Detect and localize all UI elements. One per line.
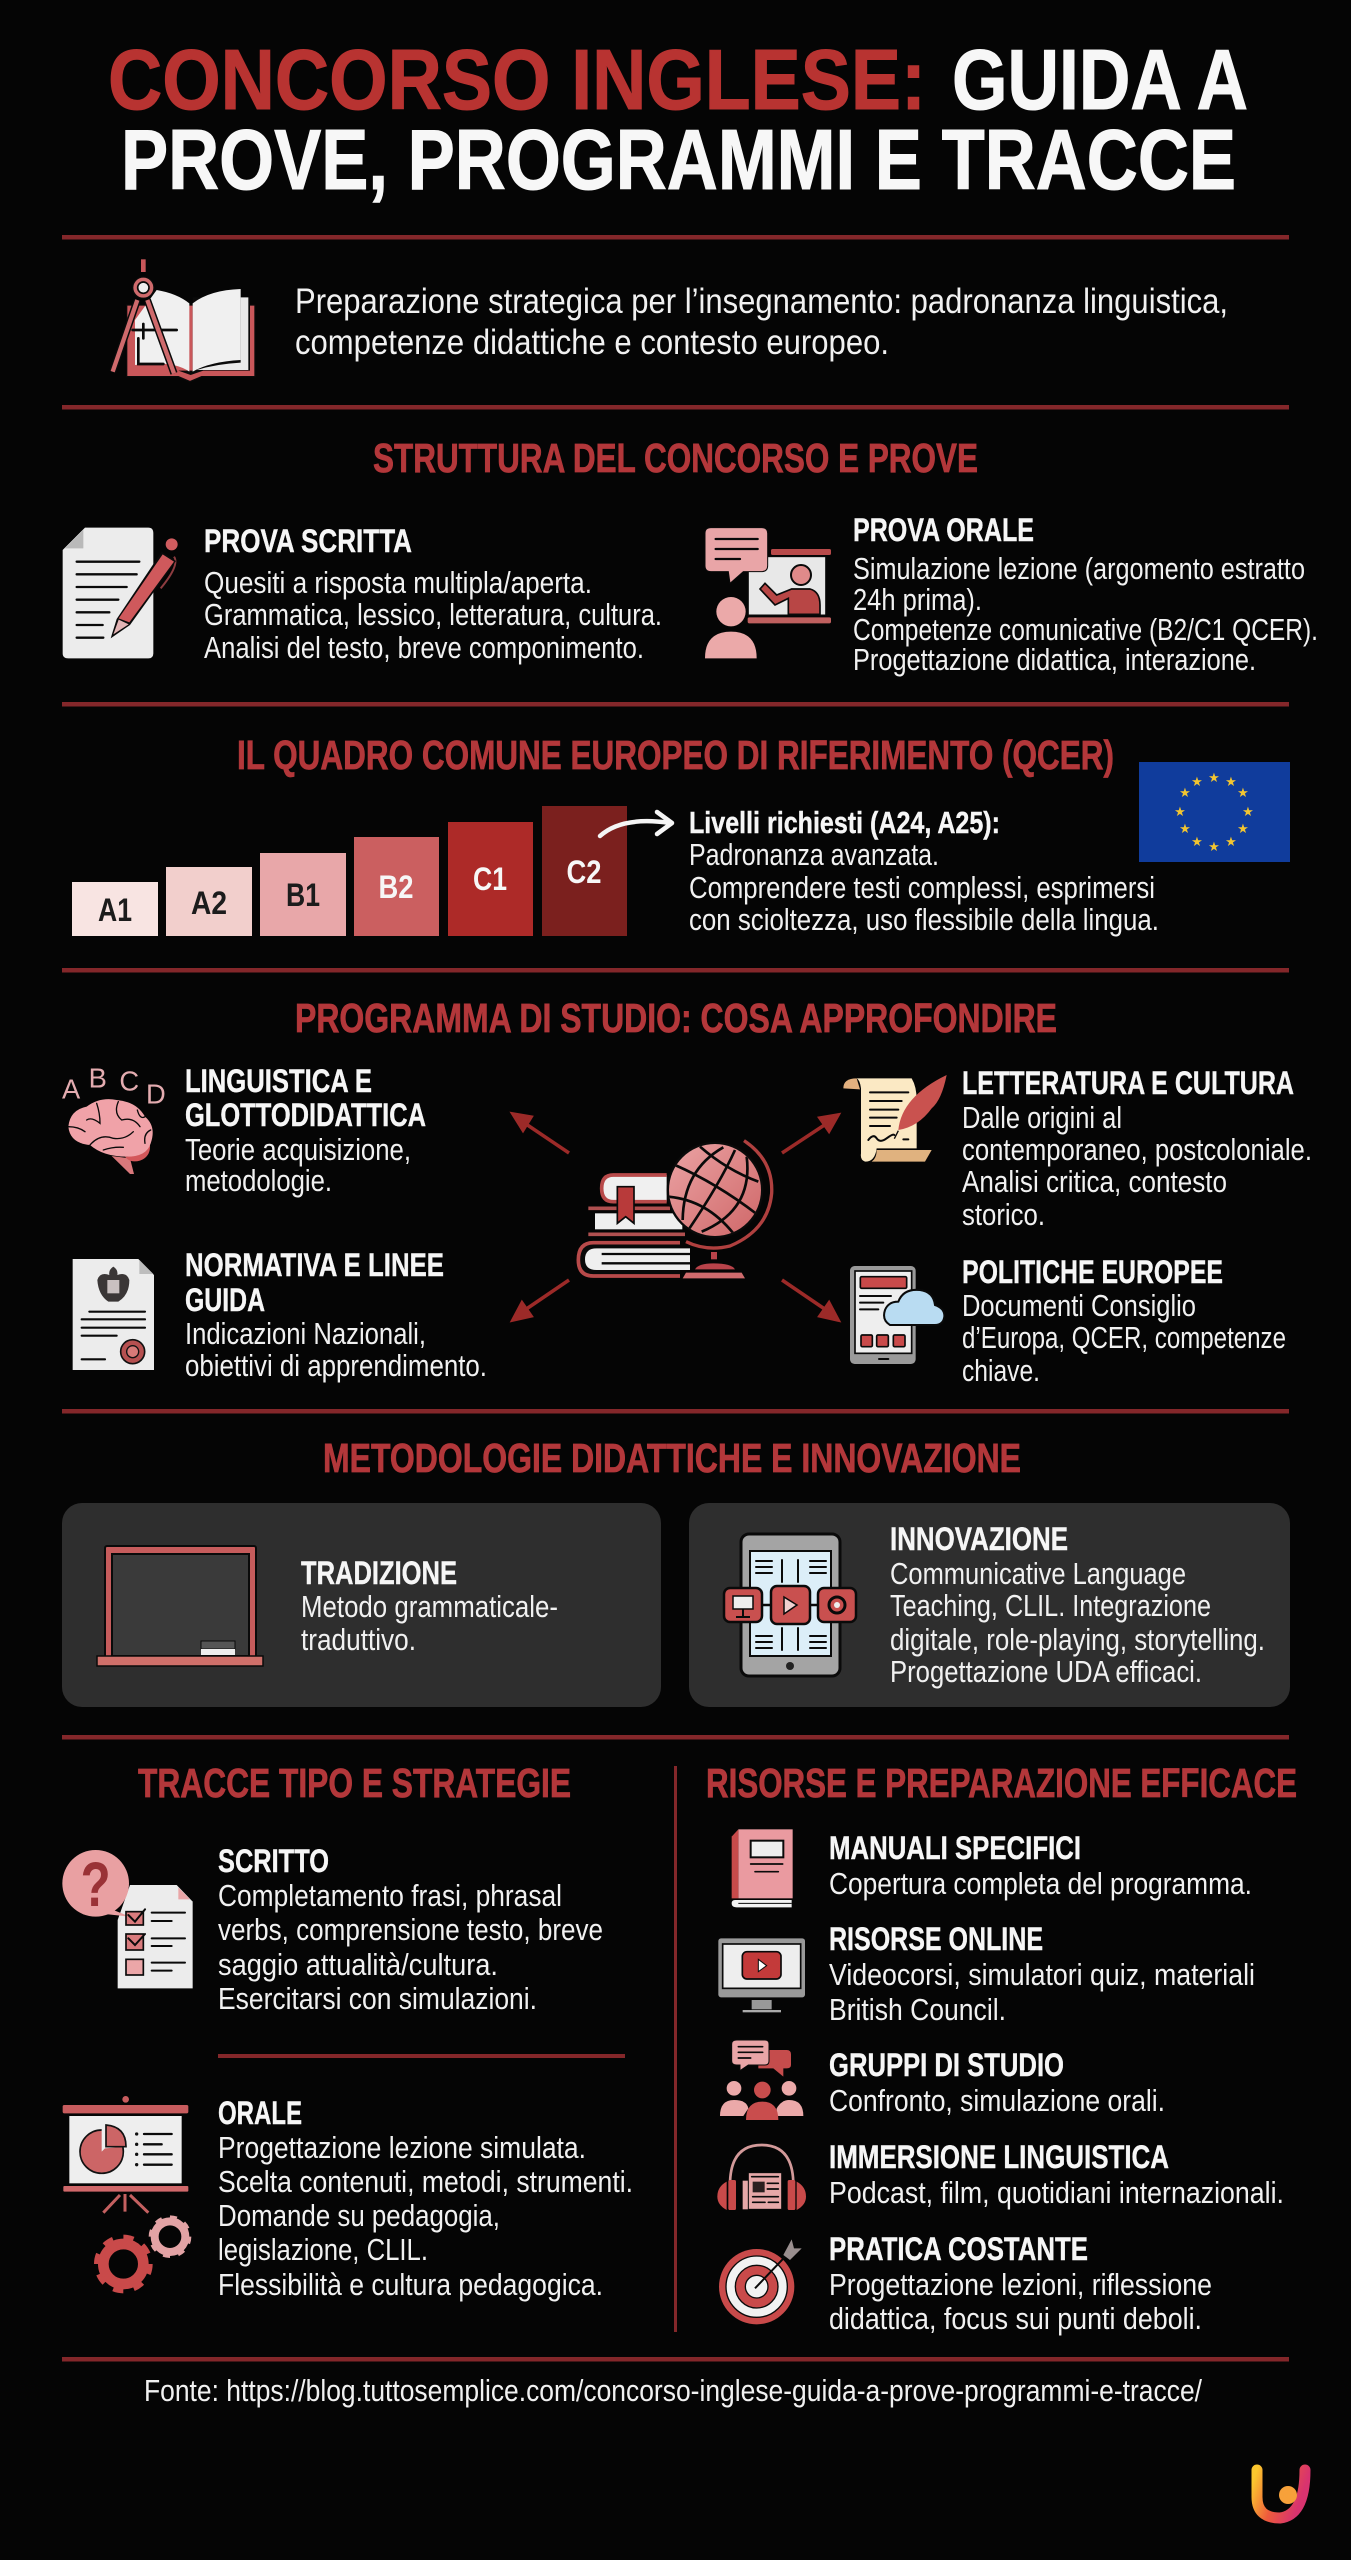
text: politiche: chiave. bbox=[962, 1354, 1040, 1388]
icon: brain with letters: D bbox=[146, 1078, 166, 1109]
text: gruppi bbox=[829, 2047, 1165, 2118]
text: pratica bbox=[829, 2231, 1212, 2336]
icon: compass and book bbox=[113, 259, 255, 382]
icon: blackboard bbox=[97, 1546, 263, 1666]
text: orale: ORALE bbox=[218, 2095, 302, 2131]
text: politiche: Documenti Consiglio bbox=[962, 1289, 1196, 1323]
arrow: levels to text bbox=[600, 812, 672, 836]
icon: EU flag: ★ bbox=[1237, 785, 1249, 800]
panel: tracce bbox=[62, 1760, 633, 2302]
icon: globe and books bbox=[578, 1141, 772, 1278]
text: innovazione: Communicative Language bbox=[890, 1557, 1186, 1591]
icon: tablet with media tiles bbox=[724, 1534, 856, 1676]
text: orale: Domande su pedagogia, bbox=[218, 2199, 500, 2233]
text: innovazione: digitale, role-playing, storytelling. bbox=[890, 1623, 1265, 1657]
card: innovazione bbox=[689, 1503, 1290, 1707]
card: tradizione bbox=[62, 1503, 661, 1707]
icon: brain with letters: C bbox=[119, 1066, 139, 1097]
text: normativa: Indicazioni Nazionali, bbox=[185, 1317, 426, 1351]
text: innovazione: Teaching, CLIL. Integrazione bbox=[890, 1589, 1211, 1623]
text: gruppi: GRUPPI DI STUDIO bbox=[829, 2047, 1064, 2083]
text: scritto bbox=[218, 1843, 603, 2016]
text: orale: legislazione, CLIL. bbox=[218, 2233, 428, 2267]
text: immersione bbox=[829, 2139, 1284, 2210]
icon: normative document bbox=[73, 1259, 154, 1370]
text: tradizione: traduttivo. bbox=[301, 1623, 416, 1657]
text: immersione: IMMERSIONE LINGUISTICA bbox=[829, 2139, 1169, 2175]
text: risorse online: British Council. bbox=[829, 1993, 1006, 2027]
text: normativa: GUIDA bbox=[185, 1282, 265, 1318]
intro text bbox=[295, 282, 1228, 362]
icon: EU flag: ★ bbox=[1237, 821, 1249, 836]
text: scritto: verbs, comprensione testo, breve bbox=[218, 1913, 603, 1947]
icon: study group bbox=[720, 2040, 803, 2120]
panel: programma bbox=[62, 995, 1312, 1388]
intro text: competenze didattiche e contesto europeo. bbox=[295, 323, 889, 362]
arrows: from hub to topics bbox=[513, 1114, 838, 1320]
text: manuali: Copertura completa del programma. bbox=[829, 1867, 1252, 1901]
text: prova scritta: Quesiti a risposta multipla/aperta. bbox=[204, 566, 592, 600]
text: linguistica: Teorie acquisizione, bbox=[185, 1133, 411, 1167]
chart: CEFR level steps: C2 bbox=[566, 854, 602, 890]
text: letteratura: storico. bbox=[962, 1198, 1045, 1232]
heading: metodologie: METODOLOGIE DIDATTICHE E INNOVAZIONE bbox=[323, 1435, 1021, 1481]
text: normativa: obiettivi di apprendimento. bbox=[185, 1349, 487, 1383]
icon: target bbox=[719, 2239, 802, 2324]
icon: brain with letters: A bbox=[62, 1073, 81, 1104]
icon: EU flag: ★ bbox=[1174, 804, 1186, 819]
panel: risorse bbox=[706, 1760, 1297, 2336]
text: risorse online: RISORSE ONLINE bbox=[829, 1921, 1043, 1957]
text: normativa bbox=[185, 1247, 487, 1383]
icon: question and checklist: ? bbox=[81, 1850, 111, 1920]
chart: CEFR level steps: A1 bbox=[98, 892, 132, 928]
logo bbox=[1257, 2470, 1305, 2518]
icon: oral exam bbox=[705, 528, 831, 658]
icon: EU flag bbox=[1139, 762, 1290, 862]
icon: scroll and quill bbox=[843, 1075, 947, 1162]
icon: brain with letters bbox=[62, 1062, 166, 1174]
icon: EU flag: ★ bbox=[1179, 785, 1191, 800]
icon: EU flag: ★ bbox=[1225, 834, 1237, 849]
text: pratica: Progettazione lezioni, riflessione bbox=[829, 2268, 1212, 2302]
icon: EU flag: ★ bbox=[1208, 770, 1220, 785]
text: prova orale: PROVA ORALE bbox=[853, 512, 1034, 548]
heading: QCER: IL QUADRO COMUNE EUROPEO DI RIFERIMENTO (QCER) bbox=[237, 732, 1114, 778]
icon: EU flag: ★ bbox=[1191, 774, 1203, 789]
text: orale bbox=[218, 2095, 633, 2302]
text: scritto: Completamento frasi, phrasal bbox=[218, 1879, 562, 1913]
text: risorse online: Videocorsi, simulatori quiz, materiali bbox=[829, 1958, 1255, 1992]
title: GUIDA A bbox=[952, 33, 1248, 128]
text: linguistica: GLOTTODIDATTICA bbox=[185, 1097, 426, 1133]
icon: brain with letters: B bbox=[89, 1062, 107, 1093]
heading: tracce: TRACCE TIPO E STRATEGIE bbox=[138, 1760, 571, 1806]
panel: metodologie bbox=[62, 1435, 1290, 1707]
text: prova orale bbox=[853, 512, 1318, 677]
icon: manual bbox=[732, 1829, 793, 1907]
panel: struttura bbox=[63, 435, 1318, 677]
title bbox=[108, 33, 1248, 208]
text: orale: Progettazione lezione simulata. bbox=[218, 2131, 586, 2165]
text: tradizione bbox=[301, 1555, 558, 1657]
text: politiche bbox=[962, 1254, 1286, 1388]
text: tradizione: Metodo grammaticale- bbox=[301, 1590, 558, 1624]
text: manuali: MANUALI SPECIFICI bbox=[829, 1830, 1081, 1866]
text: manuali bbox=[829, 1830, 1252, 1901]
source line: Fonte: https://blog.tuttosemplice.com/concorso-inglese-guida-a-prove-programmi-e-tracce/ bbox=[144, 2374, 1202, 2408]
text: prova orale: 24h prima). bbox=[853, 583, 982, 617]
text: livelli richiesti bbox=[689, 805, 1159, 937]
text: prova scritta: PROVA SCRITTA bbox=[204, 523, 412, 559]
panel: intro bbox=[113, 259, 1228, 382]
text: normativa: NORMATIVA E LINEE bbox=[185, 1247, 444, 1283]
text: innovazione bbox=[890, 1521, 1265, 1689]
text: livelli richiesti: Padronanza avanzata. bbox=[689, 838, 939, 872]
text: orale: Flessibilità e cultura pedagogica. bbox=[218, 2268, 603, 2302]
icon: EU flag: ★ bbox=[1225, 774, 1237, 789]
chart: CEFR level steps: A2 bbox=[191, 885, 227, 921]
icon: headphones and newspaper bbox=[717, 2145, 806, 2210]
text: letteratura bbox=[962, 1065, 1312, 1232]
icon: EU flag: ★ bbox=[1179, 821, 1191, 836]
chart: CEFR level steps: B2 bbox=[378, 869, 414, 905]
text: prova orale: Progettazione didattica, interazione. bbox=[853, 643, 1256, 677]
text: letteratura: Dalle origini al bbox=[962, 1101, 1122, 1135]
text: scritto: Esercitarsi con simulazioni. bbox=[218, 1982, 537, 2016]
panel: QCER bbox=[72, 732, 1290, 937]
text: politiche: POLITICHE EUROPEE bbox=[962, 1254, 1223, 1290]
text: risorse online bbox=[829, 1921, 1255, 2027]
icon: written test bbox=[63, 528, 178, 658]
text: prova scritta bbox=[204, 523, 662, 665]
text: innovazione: Progettazione UDA efficaci. bbox=[890, 1655, 1202, 1689]
text: immersione: Podcast, film, quotidiani internazionali. bbox=[829, 2176, 1284, 2210]
icon: video monitor bbox=[718, 1938, 805, 2012]
text: linguistica: LINGUISTICA E bbox=[185, 1063, 372, 1099]
chart: CEFR level steps: C1 bbox=[473, 861, 507, 897]
text: orale: Scelta contenuti, metodi, strumenti. bbox=[218, 2165, 633, 2199]
text: tradizione: TRADIZIONE bbox=[301, 1555, 457, 1591]
text: letteratura: Analisi critica, contesto bbox=[962, 1165, 1227, 1199]
text: livelli richiesti: Livelli richiesti (A24, A25): bbox=[689, 805, 1000, 840]
chart: CEFR level steps bbox=[72, 806, 627, 936]
chart: CEFR level steps: B1 bbox=[286, 877, 320, 913]
text: prova scritta: Grammatica, lessico, letteratura, cultura. bbox=[204, 598, 662, 632]
title: CONCORSO INGLESE: bbox=[108, 33, 926, 128]
icon: EU flag: ★ bbox=[1208, 839, 1220, 854]
text: gruppi: Confronto, simulazione orali. bbox=[829, 2084, 1165, 2118]
icon: EU flag: ★ bbox=[1242, 804, 1254, 819]
text: livelli richiesti: con scioltezza, uso flessibile della lingua. bbox=[689, 903, 1159, 937]
text: prova scritta: Analisi del testo, breve componimento. bbox=[204, 631, 644, 665]
icon: question and checklist bbox=[62, 1850, 193, 1988]
icon: tablet with cloud bbox=[850, 1266, 944, 1364]
icon: EU flag: ★ bbox=[1191, 834, 1203, 849]
heading: programma: PROGRAMMA DI STUDIO: COSA APPROFONDIRE bbox=[295, 995, 1057, 1041]
heading: struttura: STRUTTURA DEL CONCORSO E PROVE bbox=[373, 435, 978, 481]
text: scritto: SCRITTO bbox=[218, 1843, 329, 1879]
text: livelli richiesti: Comprendere testi complessi, esprimersi bbox=[689, 871, 1155, 905]
text: scritto: saggio attualità/cultura. bbox=[218, 1948, 498, 1982]
icon: presentation with gears bbox=[63, 2096, 189, 2290]
intro text: Preparazione strategica per l’insegnamento: padronanza linguistica, bbox=[295, 282, 1228, 321]
text: pratica: didattica, focus sui punti deboli. bbox=[829, 2302, 1202, 2336]
text: linguistica: metodologie. bbox=[185, 1164, 332, 1198]
text: innovazione: INNOVAZIONE bbox=[890, 1521, 1068, 1557]
text: linguistica bbox=[185, 1063, 426, 1198]
text: pratica: PRATICA COSTANTE bbox=[829, 2231, 1088, 2267]
